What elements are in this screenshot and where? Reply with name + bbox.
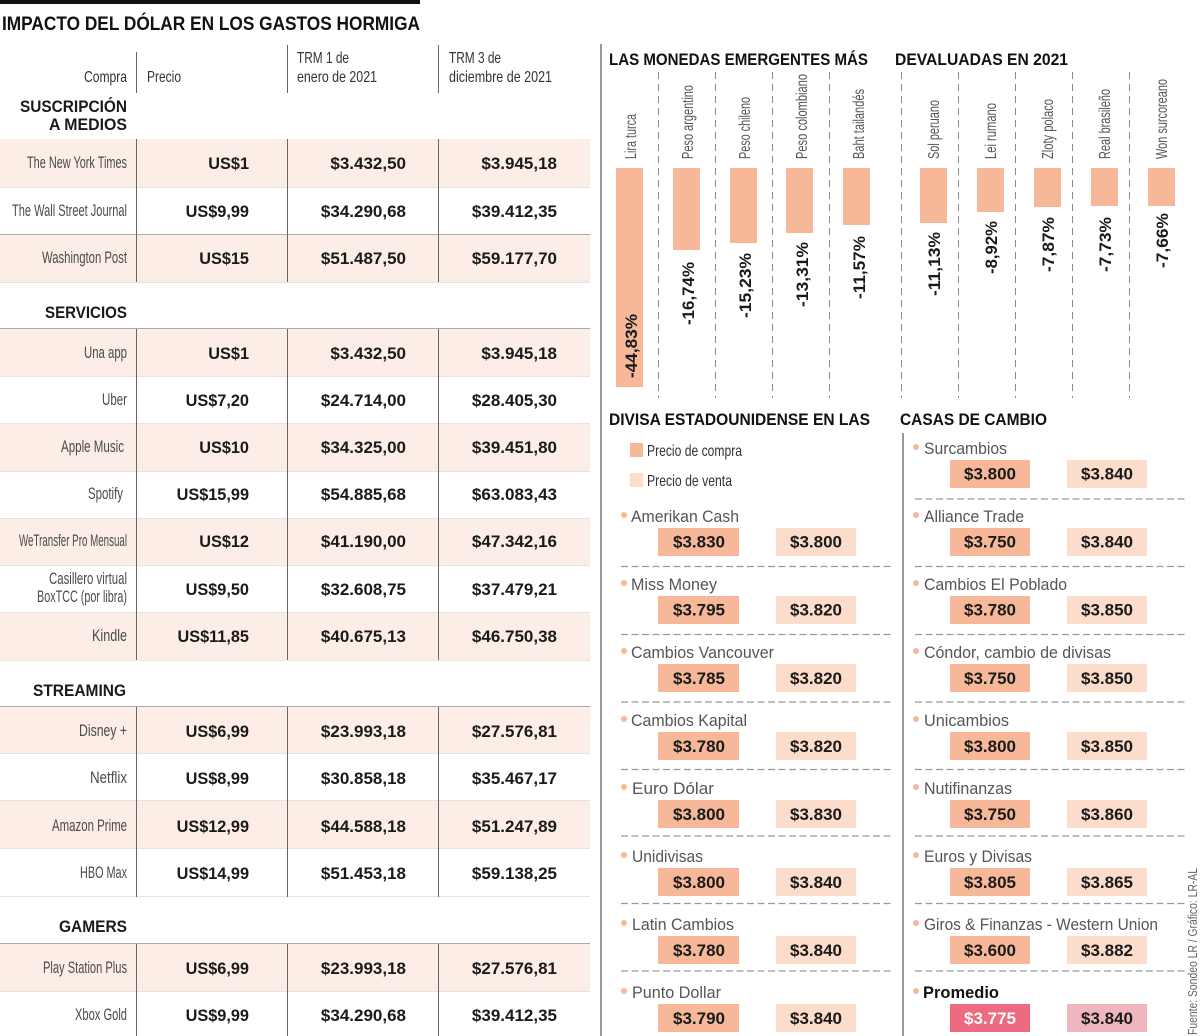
section: servicios: $34.325,00 bbox=[321, 438, 406, 457]
table header: TRM 3 de bbox=[449, 50, 501, 67]
section: gamers: US$9,99 bbox=[186, 1007, 249, 1025]
section: servicios: $47.342,16 bbox=[472, 532, 557, 551]
panel: casas de cambio, columna derecha: $3.840 bbox=[1081, 532, 1133, 552]
section: servicios: Spotify bbox=[88, 484, 123, 503]
section: servicios: Apple Music bbox=[61, 437, 124, 456]
panel: casas de cambio, columna derecha: Surcambios bbox=[924, 439, 1007, 458]
bar chart: monedas devaluadas: Lei rumano bbox=[983, 103, 1000, 159]
heading: divisa en casas de cambio: DIVISA ESTADOUNIDENSE EN LAS bbox=[609, 410, 870, 429]
panel: casas de cambio, columna izquierda: $3.780 bbox=[673, 737, 725, 756]
bar chart: monedas devaluadas: -13,31% bbox=[793, 242, 812, 307]
table header: TRM 1 de bbox=[297, 50, 349, 67]
bar chart: monedas devaluadas: -44,83% bbox=[622, 314, 641, 378]
title bbox=[0, 0, 420, 35]
section: gamers: $27.576,81 bbox=[472, 959, 557, 978]
heading: suscripción a medios: A MEDIOS bbox=[49, 115, 127, 134]
section: servicios: $46.750,38 bbox=[472, 627, 557, 646]
section: gamers: $34.290,68 bbox=[321, 1006, 406, 1025]
table header: enero de 2021 bbox=[297, 69, 377, 86]
panel: casas de cambio, columna derecha: $3.775 bbox=[964, 1009, 1016, 1028]
heading: divisa en casas de cambio bbox=[609, 410, 1047, 429]
bar chart: monedas devaluadas: Won surcoreano bbox=[1154, 79, 1171, 159]
section: servicios: $37.479,21 bbox=[472, 580, 557, 599]
panel: casas de cambio, columna izquierda: Unidivisas bbox=[632, 847, 703, 866]
section: servicios: $41.190,00 bbox=[321, 532, 406, 551]
panel: casas de cambio, columna izquierda: $3.785 bbox=[673, 669, 725, 688]
panel: casas de cambio, columna derecha: $3.780 bbox=[964, 600, 1016, 620]
section: servicios: Una app bbox=[84, 343, 127, 362]
panel: casas de cambio, columna derecha: $3.750 bbox=[964, 532, 1016, 552]
section: suscripción a medios: US$9,99 bbox=[186, 203, 249, 221]
panel: casas de cambio, columna izquierda: Miss Money bbox=[631, 575, 717, 594]
panel: casas de cambio, columna derecha: $3.800 bbox=[964, 737, 1016, 756]
section: servicios: Casillero virtual bbox=[49, 569, 127, 588]
table header: diciembre de 2021 bbox=[449, 69, 552, 86]
section: servicios: US$7,20 bbox=[186, 392, 249, 410]
bar chart: monedas devaluadas bbox=[616, 72, 1175, 398]
panel: casas de cambio, columna izquierda: $3.800 bbox=[673, 805, 725, 824]
heading: monedas emergentes: LAS MONEDAS EMERGENTES MÁS bbox=[609, 50, 868, 69]
bar chart: monedas devaluadas: Peso argentino bbox=[680, 85, 697, 159]
bar chart: monedas devaluadas: Peso chileno bbox=[737, 97, 754, 159]
section: servicios: US$11,85 bbox=[177, 628, 249, 646]
section: servicios: $32.608,75 bbox=[321, 580, 406, 599]
panel: casas de cambio, columna izquierda: $3.840 bbox=[790, 1009, 842, 1028]
panel: casas de cambio, columna derecha: $3.805 bbox=[964, 873, 1016, 892]
panel: casas de cambio, columna izquierda bbox=[621, 507, 893, 1032]
section: suscripción a medios: $3.945,18 bbox=[481, 154, 557, 173]
panel: casas de cambio, columna izquierda: $3.820 bbox=[790, 669, 842, 688]
panel: casas de cambio, columna derecha: $3.750 bbox=[964, 805, 1016, 824]
section: servicios: US$15,99 bbox=[177, 486, 249, 504]
bar chart: monedas devaluadas: -7,66% bbox=[1153, 213, 1172, 268]
legend: Precio de venta bbox=[647, 473, 732, 490]
section: streaming: $27.576,81 bbox=[472, 722, 557, 741]
bar chart: monedas devaluadas: Baht tailandés bbox=[851, 89, 868, 159]
section: streaming: US$12,99 bbox=[177, 818, 249, 836]
section: suscripción a medios: $34.290,68 bbox=[321, 202, 406, 221]
section: streaming: $35.467,17 bbox=[472, 769, 557, 788]
section: suscripción a medios: US$15 bbox=[199, 250, 249, 268]
bar chart: monedas devaluadas: -8,92% bbox=[982, 221, 1001, 274]
section: streaming: US$6,99 bbox=[186, 723, 249, 741]
panel: casas de cambio, columna izquierda: Cambios Kapital bbox=[631, 711, 747, 730]
panel: casas de cambio, columna derecha bbox=[903, 433, 1188, 1036]
section: streaming: $51.453,18 bbox=[321, 864, 406, 883]
panel: casas de cambio, columna derecha: Alliance Trade bbox=[924, 507, 1024, 526]
panel: casas de cambio, columna izquierda: $3.820 bbox=[790, 737, 842, 756]
bar chart: monedas devaluadas: Lira turca bbox=[623, 114, 640, 159]
section: suscripción a medios: Washington Post bbox=[42, 248, 127, 267]
bar chart: monedas devaluadas: Sol peruano bbox=[926, 100, 943, 159]
panel: casas de cambio, columna derecha: $3.840 bbox=[1081, 464, 1133, 484]
section: suscripción a medios: The Wall Street Journal bbox=[12, 201, 127, 220]
heading: monedas emergentes bbox=[609, 50, 1068, 69]
panel: casas de cambio, columna izquierda: $3.780 bbox=[673, 941, 725, 960]
section: servicios: $3.432,50 bbox=[330, 344, 406, 363]
bar chart: monedas devaluadas: -11,57% bbox=[850, 236, 869, 299]
panel: casas de cambio, columna izquierda: Cambios Vancouver bbox=[631, 643, 774, 662]
title: IMPACTO DEL DÓLAR EN LOS GASTOS HORMIGA bbox=[2, 11, 420, 35]
section: streaming: Disney + bbox=[79, 721, 127, 740]
section: gamers: Xbox Gold bbox=[75, 1005, 127, 1024]
panel: casas de cambio, columna izquierda: $3.790 bbox=[673, 1009, 725, 1028]
section: streaming: $30.858,18 bbox=[321, 769, 406, 788]
section: servicios: Kindle bbox=[92, 626, 127, 645]
panel: casas de cambio, columna derecha: $3.750 bbox=[964, 669, 1016, 688]
legend: Precio de compra bbox=[647, 443, 742, 460]
bar chart: monedas devaluadas: -7,73% bbox=[1096, 217, 1115, 272]
section: gamers: Play Station Plus bbox=[43, 958, 127, 977]
bar chart: monedas devaluadas: -7,87% bbox=[1039, 217, 1058, 272]
bar chart: monedas devaluadas: Peso colombiano bbox=[794, 74, 811, 159]
heading: gamers: GAMERS bbox=[59, 917, 127, 936]
panel: casas de cambio, columna derecha: $3.882 bbox=[1081, 941, 1133, 960]
panel: casas de cambio, columna derecha: Promedio bbox=[923, 983, 999, 1002]
panel: casas de cambio, columna derecha: $3.865 bbox=[1081, 873, 1133, 892]
source note: Fuente: Sondeo LR / Gráfico: LR-AL bbox=[1185, 868, 1200, 1035]
section: streaming bbox=[0, 681, 590, 897]
section: gamers bbox=[0, 917, 590, 1036]
section: suscripción a medios: The New York Times bbox=[27, 153, 127, 172]
bar chart: monedas devaluadas: -16,74% bbox=[679, 262, 698, 325]
section: streaming: $59.138,25 bbox=[472, 864, 557, 883]
panel: casas de cambio, columna derecha: $3.850 bbox=[1081, 737, 1133, 756]
section: gamers: $39.412,35 bbox=[472, 1006, 557, 1025]
section: suscripción a medios bbox=[0, 97, 590, 282]
panel: casas de cambio, columna izquierda: $3.800 bbox=[673, 873, 725, 892]
panel: casas de cambio, columna izquierda: $3.795 bbox=[673, 600, 725, 620]
panel: casas de cambio, columna derecha: Giros & Finanzas - Western Union bbox=[924, 915, 1158, 934]
section: streaming: $23.993,18 bbox=[321, 722, 406, 741]
section: servicios: $28.405,30 bbox=[472, 391, 557, 410]
table header: Precio bbox=[147, 69, 181, 86]
section: streaming: US$8,99 bbox=[186, 770, 249, 788]
heading: streaming: STREAMING bbox=[33, 681, 126, 700]
bar chart: monedas devaluadas: -11,13% bbox=[925, 232, 944, 296]
panel: casas de cambio, columna izquierda: $3.800 bbox=[790, 532, 842, 552]
section: streaming: Amazon Prime bbox=[52, 816, 127, 835]
section: suscripción a medios: $39.412,35 bbox=[472, 202, 557, 221]
section: suscripción a medios: US$1 bbox=[208, 155, 249, 173]
legend bbox=[630, 443, 742, 490]
section: suscripción a medios: $59.177,70 bbox=[472, 249, 557, 268]
panel: casas de cambio, columna derecha: Cóndor, cambio de divisas bbox=[924, 643, 1111, 662]
section: servicios: $63.083,43 bbox=[472, 485, 557, 504]
bar chart: monedas devaluadas: -15,23% bbox=[736, 253, 755, 318]
panel: casas de cambio, columna derecha: Unicambios bbox=[924, 711, 1009, 730]
panel: casas de cambio, columna derecha: $3.600 bbox=[964, 941, 1016, 960]
section: suscripción a medios: $51.487,50 bbox=[321, 249, 406, 268]
table header bbox=[84, 45, 552, 93]
section: servicios: US$12 bbox=[199, 533, 249, 551]
bar chart: monedas devaluadas: Zloty polaco bbox=[1040, 99, 1057, 159]
section: servicios: Uber bbox=[102, 390, 127, 409]
panel: casas de cambio, columna derecha: $3.850 bbox=[1081, 669, 1133, 688]
panel: casas de cambio, columna izquierda: Punto Dollar bbox=[632, 983, 721, 1002]
panel: casas de cambio, columna izquierda: $3.830 bbox=[673, 532, 725, 552]
panel: casas de cambio, columna izquierda: Euro Dólar bbox=[632, 779, 714, 798]
section: servicios: US$1 bbox=[208, 345, 249, 363]
panel: casas de cambio, columna derecha: $3.840 bbox=[1081, 1009, 1133, 1028]
section: servicios bbox=[0, 303, 590, 660]
panel: casas de cambio, columna izquierda: Amerikan Cash bbox=[631, 507, 739, 526]
panel: casas de cambio, columna izquierda: $3.840 bbox=[790, 873, 842, 892]
heading: suscripción a medios: SUSCRIPCIÓN bbox=[20, 97, 127, 116]
panel: casas de cambio, columna derecha: $3.800 bbox=[964, 464, 1016, 484]
panel: casas de cambio, columna izquierda: Latin Cambios bbox=[632, 915, 734, 934]
section: servicios: US$10 bbox=[199, 439, 249, 457]
section: streaming: $44.588,18 bbox=[321, 817, 406, 836]
section: servicios: $39.451,80 bbox=[472, 438, 557, 457]
section: suscripción a medios: $3.432,50 bbox=[330, 154, 406, 173]
panel: casas de cambio, columna izquierda: $3.840 bbox=[790, 941, 842, 960]
section: servicios: BoxTCC (por libra) bbox=[37, 587, 127, 606]
panel: casas de cambio, columna izquierda: $3.820 bbox=[790, 600, 842, 620]
bar chart: monedas devaluadas: Real brasileño bbox=[1097, 89, 1114, 159]
panel: casas de cambio, columna derecha: Nutifinanzas bbox=[924, 779, 1012, 798]
heading: monedas emergentes: DEVALUADAS EN 2021 bbox=[895, 50, 1068, 69]
panel: casas de cambio, columna derecha: Euros y Divisas bbox=[924, 847, 1032, 866]
section: servicios: $54.885,68 bbox=[321, 485, 406, 504]
panel: casas de cambio, columna derecha: Cambios El Poblado bbox=[924, 575, 1067, 594]
section: gamers: US$6,99 bbox=[186, 960, 249, 978]
section: servicios: WeTransfer Pro Mensual bbox=[19, 531, 127, 550]
section: streaming: $51.247,89 bbox=[472, 817, 557, 836]
panel: casas de cambio, columna izquierda: $3.830 bbox=[790, 805, 842, 824]
section: streaming: Netflix bbox=[90, 768, 127, 787]
panel: casas de cambio, columna derecha: $3.850 bbox=[1081, 600, 1133, 620]
heading: suscripción a medios bbox=[20, 97, 127, 134]
section: gamers: $23.993,18 bbox=[321, 959, 406, 978]
table header: Compra bbox=[84, 69, 127, 86]
panel: casas de cambio, columna derecha: $3.860 bbox=[1081, 805, 1133, 824]
section: servicios: $3.945,18 bbox=[481, 344, 557, 363]
section: streaming: HBO Max bbox=[80, 863, 127, 882]
section: servicios: $40.675,13 bbox=[321, 627, 406, 646]
heading: servicios: SERVICIOS bbox=[45, 303, 127, 322]
heading: divisa en casas de cambio: CASAS DE CAMBIO bbox=[900, 410, 1047, 429]
section: servicios: $24.714,00 bbox=[321, 391, 406, 410]
section: streaming: US$14,99 bbox=[177, 865, 249, 883]
section: servicios: US$9,50 bbox=[186, 581, 249, 599]
